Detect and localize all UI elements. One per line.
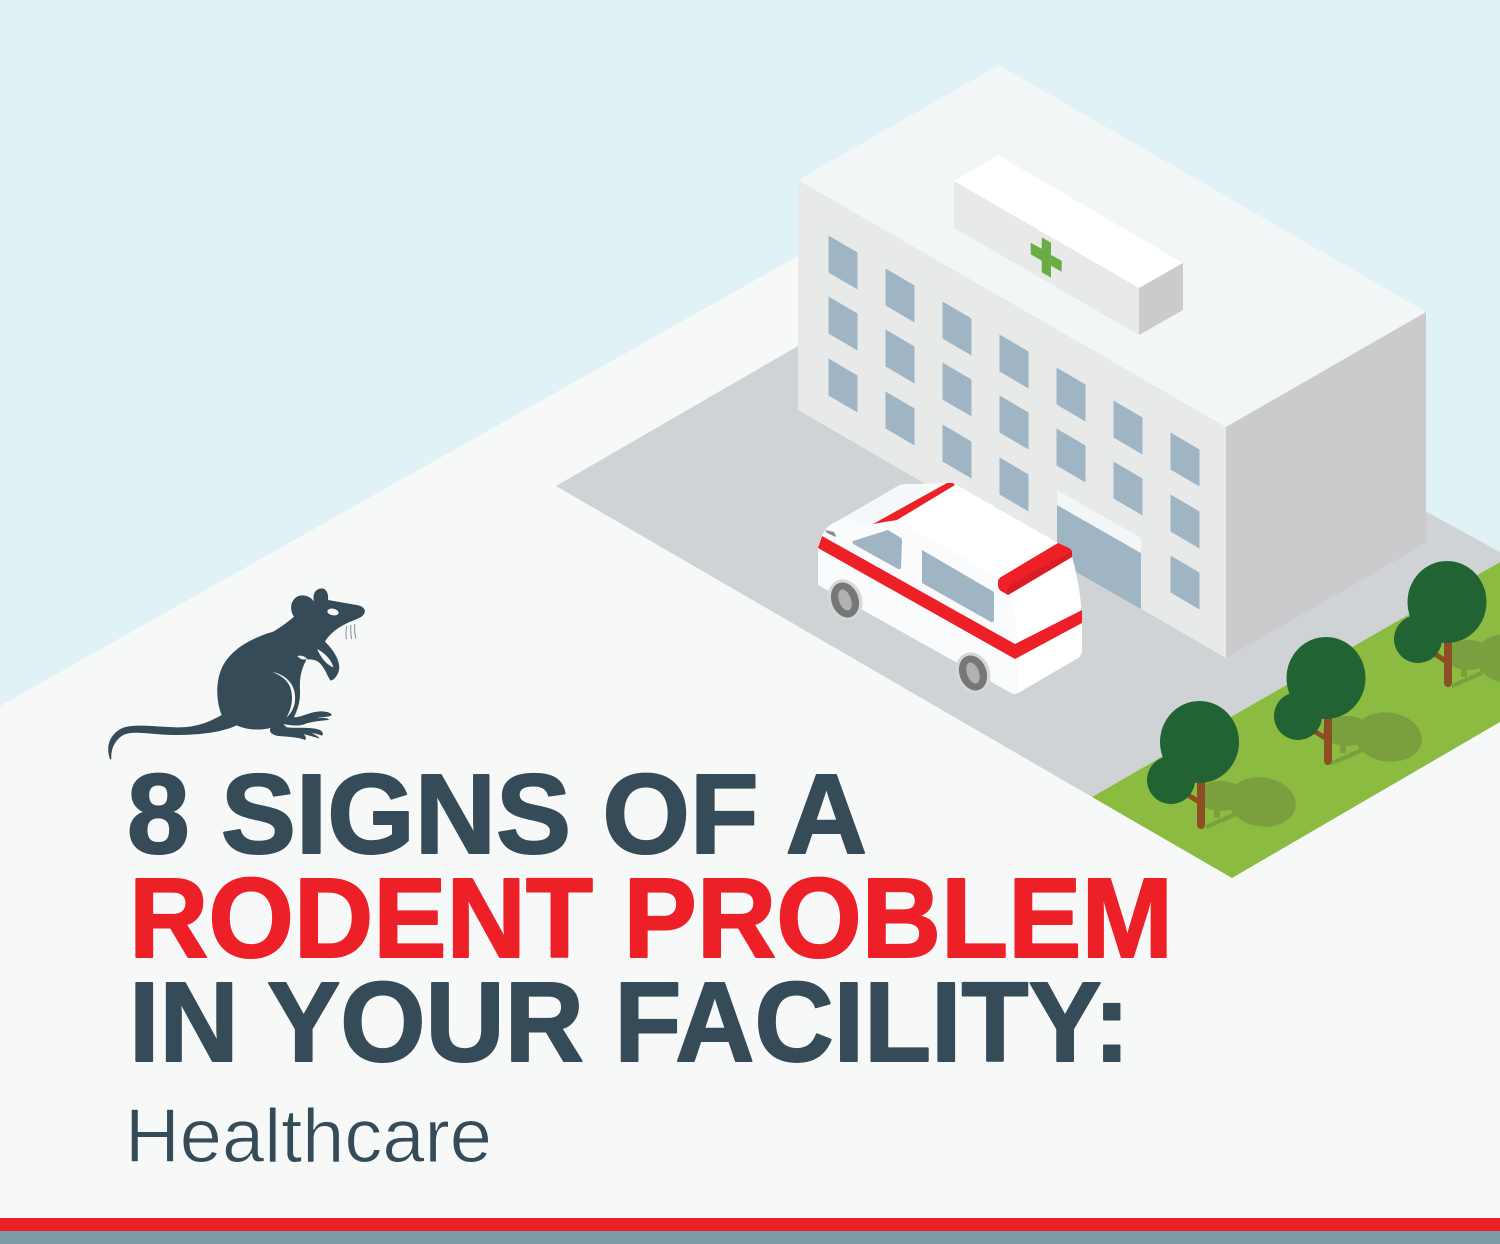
- side window: [922, 550, 994, 622]
- building roof: [798, 65, 1426, 427]
- ambulance rear face: [1008, 557, 1082, 693]
- icon: rat: [108, 588, 365, 759]
- footer red bar: [0, 1218, 1500, 1231]
- pavement: [556, 346, 1500, 797]
- tree shadows: [1197, 630, 1500, 831]
- ambulance roof: [897, 483, 1058, 578]
- front window: [852, 530, 902, 569]
- footer blue-grey bar: [0, 1231, 1500, 1244]
- lawn: [1092, 562, 1500, 878]
- rat whiskers: [346, 624, 356, 639]
- garage door: [1057, 505, 1141, 609]
- garage awning: [1057, 490, 1141, 553]
- ambulance body: [818, 483, 1082, 694]
- tree 2: [1274, 637, 1366, 761]
- rat eye: [327, 608, 339, 616]
- building front wall: [798, 180, 1226, 658]
- title line 2: RODENT PROBLEM: [129, 855, 1173, 981]
- rat leg highlight: [272, 672, 295, 717]
- building side wall: [1226, 312, 1426, 658]
- title: [127, 751, 1173, 1085]
- front wheel: [822, 574, 868, 626]
- title line 1: 8 SIGNS OF A: [127, 751, 867, 877]
- headlight: [825, 530, 836, 537]
- rooftop sign box: [954, 155, 1183, 335]
- hospital building: [798, 65, 1426, 658]
- red roof stripe: [873, 483, 955, 524]
- rat arm highlight: [317, 649, 333, 667]
- tree 3: [1394, 561, 1486, 683]
- icon: green cross: [1031, 237, 1062, 278]
- title line 3: IN YOUR FACILITY:: [129, 959, 1130, 1085]
- rear wheel: [950, 647, 996, 699]
- rat chest highlight: [297, 656, 307, 660]
- ambulance: [818, 483, 1082, 699]
- windows: [828, 236, 1200, 610]
- red side band: [818, 536, 1082, 659]
- subtitle: Healthcare: [125, 1094, 492, 1179]
- roof light bar: [998, 543, 1072, 595]
- ambulance windshield top: [843, 484, 930, 524]
- tree 1: [1147, 701, 1239, 825]
